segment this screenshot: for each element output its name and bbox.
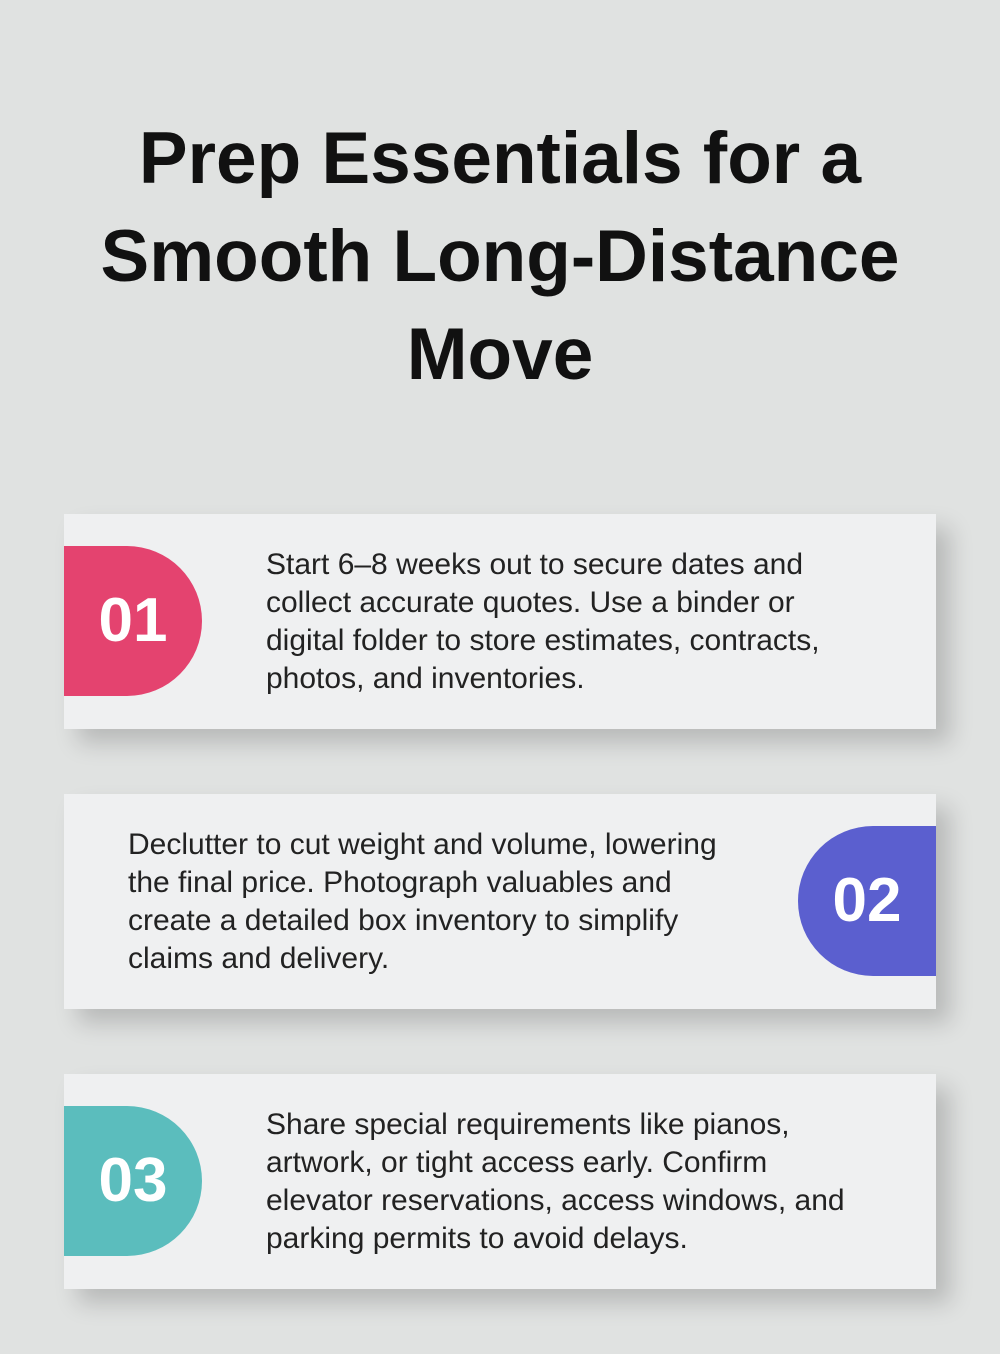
title: Smooth Long-Distance	[101, 216, 899, 297]
panel: step 03	[64, 1074, 936, 1289]
badge 02	[798, 826, 936, 976]
text 02	[128, 828, 717, 975]
text 03: artwork, or tight access early. Confirm	[266, 1146, 767, 1179]
title	[101, 118, 899, 395]
badge 02: 02	[833, 866, 901, 935]
badge 03: 03	[99, 1146, 167, 1215]
badge 03	[64, 1106, 202, 1256]
text 03: Share special requirements like pianos,	[266, 1108, 790, 1141]
badge 01	[64, 546, 202, 696]
text 01	[266, 548, 820, 695]
text 01: digital folder to store estimates, contracts,	[266, 624, 820, 657]
text 03: elevator reservations, access windows, and	[266, 1184, 845, 1217]
text 02: create a detailed box inventory to simplify	[128, 904, 678, 937]
title: Move	[407, 314, 593, 395]
panel: step 01	[64, 514, 936, 729]
text 02: the final price. Photograph valuables and	[128, 866, 672, 899]
text 03: parking permits to avoid delays.	[266, 1222, 688, 1255]
text 01: photos, and inventories.	[266, 662, 585, 695]
text 01: collect accurate quotes. Use a binder or	[266, 586, 795, 619]
text 02: claims and delivery.	[128, 942, 389, 975]
text 02: Declutter to cut weight and volume, lowering	[128, 828, 717, 861]
text 01: Start 6–8 weeks out to secure dates and	[266, 548, 803, 581]
panel: step 02	[64, 794, 936, 1009]
title: Prep Essentials for a	[139, 118, 861, 199]
text 03	[266, 1108, 845, 1255]
badge 01: 01	[99, 586, 167, 655]
